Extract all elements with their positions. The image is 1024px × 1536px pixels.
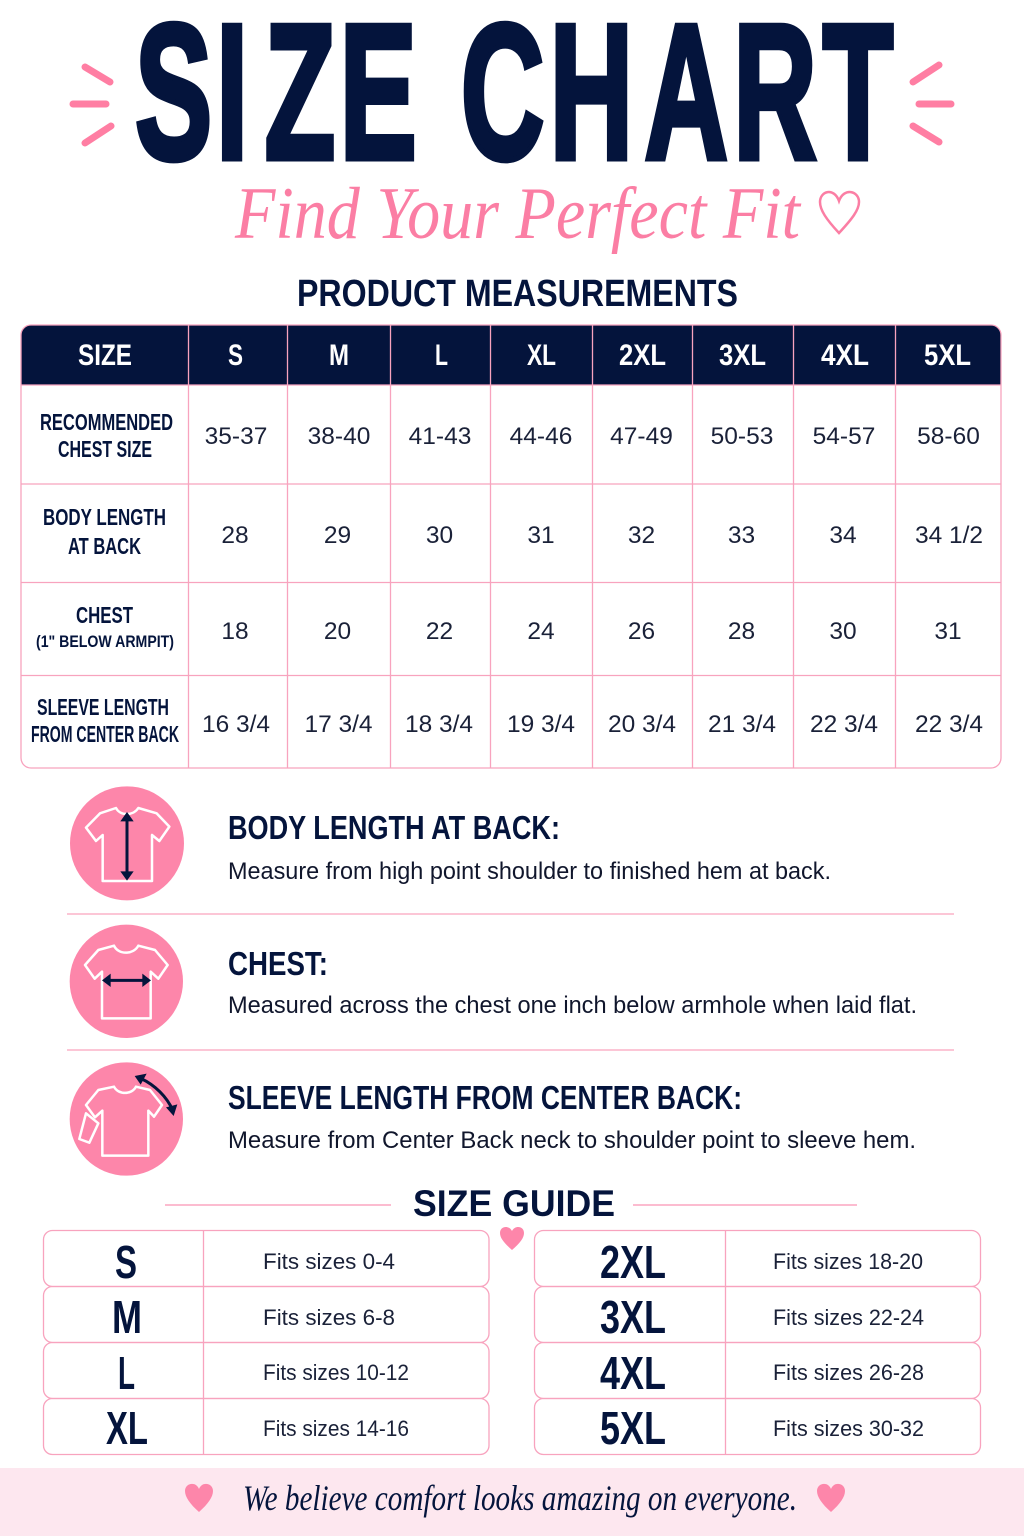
row: chest values: 28 xyxy=(728,618,755,645)
row: chest values xyxy=(221,618,962,645)
text: chest xyxy=(228,945,917,1019)
size guide: right table xyxy=(534,1230,980,1454)
heading: size guide: SIZE GUIDE xyxy=(413,1183,615,1224)
header row labels xyxy=(78,339,971,372)
text: chest: CHEST: xyxy=(228,945,328,982)
size guide: left table: Fits sizes 14-16 xyxy=(263,1416,409,1441)
row: sleeve length values: 21 3/4 xyxy=(708,711,776,738)
row heading labels: CHEST SIZE xyxy=(58,436,152,462)
row: body length values: 28 xyxy=(221,522,249,549)
row: sleeve length values: 22 3/4 xyxy=(810,711,878,738)
row: recommended chest size values: 47-49 xyxy=(610,423,673,450)
header row labels: SIZE xyxy=(78,339,132,372)
row heading labels: RECOMMENDED xyxy=(40,409,173,435)
row: chest values: 26 xyxy=(628,618,655,645)
icon: outline heart xyxy=(820,192,859,233)
row: recommended chest size values: 58-60 xyxy=(917,423,980,450)
row heading labels: CHEST xyxy=(76,602,133,628)
text: sleeve length xyxy=(228,1079,916,1154)
size guide: right table: Fits sizes 22-24 xyxy=(773,1305,924,1330)
text: chest: Measured across the chest one inch below armhole when laid flat. xyxy=(228,992,917,1019)
header row labels: 5XL xyxy=(924,339,971,372)
header row labels: XL xyxy=(527,339,556,372)
size guide: left table: S xyxy=(115,1236,137,1288)
header row labels: S xyxy=(228,339,243,372)
row heading labels: FROM CENTER BACK xyxy=(31,721,179,747)
row: sleeve length values: 20 3/4 xyxy=(608,711,676,738)
row heading labels xyxy=(31,409,179,747)
row: body length values: 34 xyxy=(829,522,857,549)
row: body length values: 32 xyxy=(628,522,655,549)
size guide: left table: Fits sizes 10-12 xyxy=(263,1360,409,1385)
row: body length values: 34 1/2 xyxy=(915,522,983,549)
row: recommended chest size values: 54-57 xyxy=(813,423,875,450)
size guide: right table: Fits sizes 30-32 xyxy=(773,1416,924,1441)
header row labels: 2XL xyxy=(619,339,666,372)
size guide: left table: XL xyxy=(106,1402,148,1454)
row: recommended chest size values xyxy=(205,423,980,450)
subtitle: Find Your Perfect Fit xyxy=(234,173,802,255)
row: chest values: 22 xyxy=(426,618,453,645)
row: recommended chest size values: 50-53 xyxy=(711,423,773,450)
size guide: right table: 2XL xyxy=(600,1236,666,1288)
footer banner xyxy=(0,1468,1024,1536)
header row labels: 3XL xyxy=(719,339,766,372)
row: chest values: 18 xyxy=(221,618,249,645)
row heading labels: BODY LENGTH xyxy=(43,504,166,530)
text: sleeve length: SLEEVE LENGTH FROM CENTER BACK: xyxy=(228,1079,742,1116)
row: sleeve length values: 18 3/4 xyxy=(405,711,473,738)
header row labels: L xyxy=(435,339,448,372)
row: body length values: 30 xyxy=(426,522,453,549)
accent: right sparkle lines xyxy=(913,65,951,142)
row: recommended chest size values: 38-40 xyxy=(308,423,370,450)
accent: left sparkle lines xyxy=(73,67,111,143)
row: body length values: 33 xyxy=(728,522,755,549)
row: body length values: 29 xyxy=(324,522,351,549)
icon: right heart xyxy=(817,1484,845,1512)
text: body length at back xyxy=(228,809,831,885)
size guide: right table: 3XL xyxy=(600,1291,666,1343)
header row labels: 4XL xyxy=(821,339,869,372)
row: chest values: 24 xyxy=(527,618,555,645)
size guide: right table: Fits sizes 26-28 xyxy=(773,1360,924,1385)
row: sleeve length values: 16 3/4 xyxy=(202,711,270,738)
row: chest values: 30 xyxy=(829,618,857,645)
row: sleeve length values xyxy=(202,711,983,738)
row: recommended chest size values: 41-43 xyxy=(409,423,471,450)
size guide: left table: M xyxy=(112,1291,142,1343)
size guide: left table xyxy=(44,1230,489,1454)
footer tagline: We believe comfort looks amazing on everyone. xyxy=(243,1478,797,1518)
icon: left heart xyxy=(185,1484,213,1512)
text: body length at back: BODY LENGTH AT BACK: xyxy=(228,809,560,846)
row: body length values xyxy=(221,522,983,549)
size guide: left table: Fits sizes 6-8 xyxy=(263,1305,395,1330)
row heading labels: SLEEVE LENGTH xyxy=(37,694,169,720)
row: recommended chest size values: 35-37 xyxy=(205,423,267,450)
size guide: left table: L xyxy=(118,1347,135,1399)
row: sleeve length values: 19 3/4 xyxy=(507,711,575,738)
row: chest values: 20 xyxy=(324,618,351,645)
icon: small heart xyxy=(500,1227,524,1250)
size guide: right table: 4XL xyxy=(600,1347,666,1399)
size guide: right table: 5XL xyxy=(600,1402,666,1454)
row: sleeve length values: 22 3/4 xyxy=(915,711,983,738)
row: recommended chest size values: 44-46 xyxy=(510,423,572,450)
text: body length at back: Measure from high point shoulder to finished hem at back. xyxy=(228,858,831,885)
header row labels: M xyxy=(329,339,349,372)
text: sleeve length: Measure from Center Back neck to shoulder point to sleeve hem. xyxy=(228,1127,916,1154)
row: chest values: 31 xyxy=(934,618,962,645)
size guide: left table: Fits sizes 0-4 xyxy=(263,1249,395,1274)
icon: chest shirt xyxy=(70,925,183,1038)
row heading labels: (1" BELOW ARMPIT) xyxy=(36,632,174,651)
icon: sleeve shirt xyxy=(70,1062,183,1176)
icon: body length shirt xyxy=(70,786,184,900)
row: sleeve length values: 17 3/4 xyxy=(304,711,373,738)
row: body length values: 31 xyxy=(527,522,555,549)
heading: product measurements: PRODUCT MEASUREMENTS xyxy=(297,273,738,315)
row heading labels: AT BACK xyxy=(68,533,141,559)
measurements table xyxy=(21,325,1001,768)
size guide: right table: Fits sizes 18-20 xyxy=(773,1249,923,1274)
